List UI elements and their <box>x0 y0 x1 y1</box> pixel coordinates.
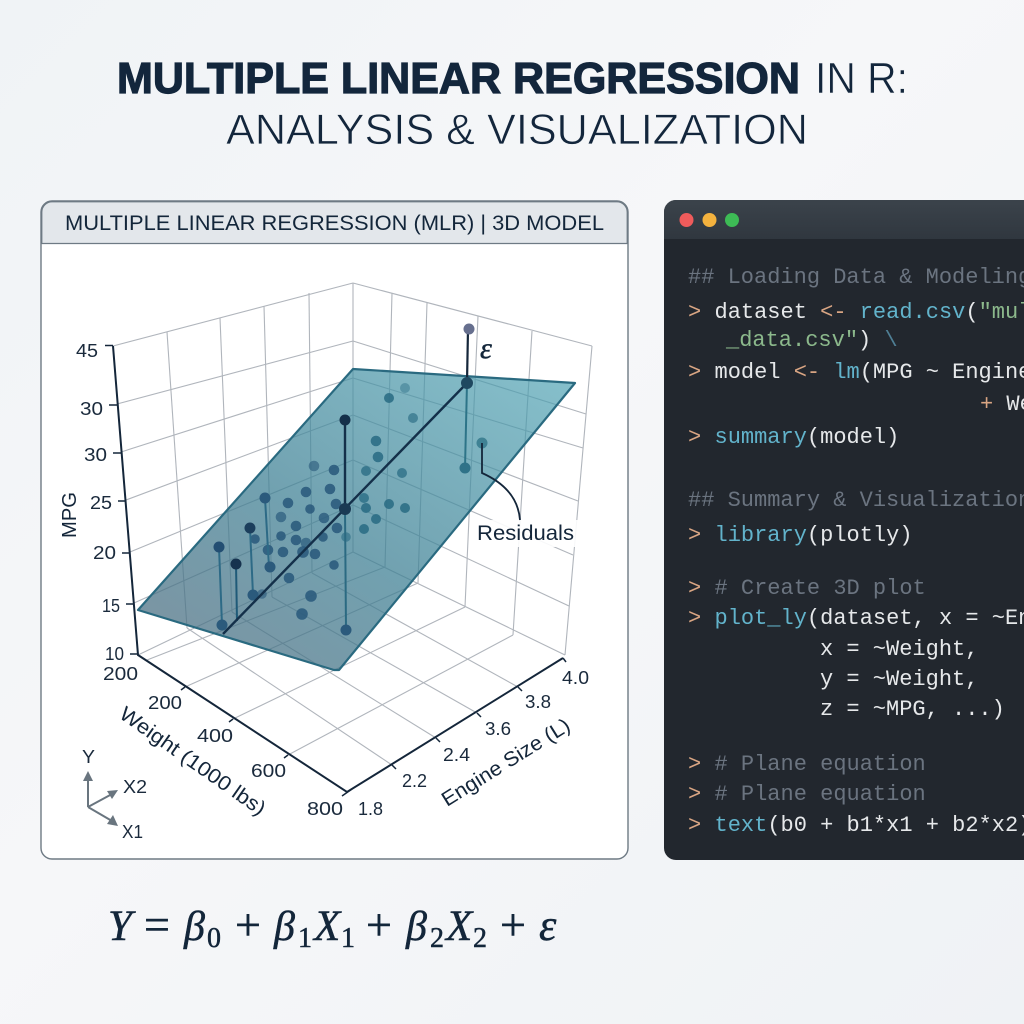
code: summary and visualization: y = ~Weight, <box>820 667 978 692</box>
y axis tick labels: 45 <box>76 340 98 361</box>
code: loading and modeling: > <box>688 360 701 385</box>
residuals callout: Residuals <box>477 522 574 545</box>
engine axis tick labels: 3.8 <box>525 691 551 712</box>
panel: 3D regression model <box>41 201 628 859</box>
y axis tick labels: 30 <box>84 444 107 465</box>
engine axis tick labels: 3.6 <box>485 718 511 739</box>
panel heading: MULTIPLE LINEAR REGRESSION (MLR) | 3D MODEL <box>65 212 604 235</box>
regression equation: 1 <box>298 923 312 954</box>
code: summary and visualization: # Create 3D plot <box>714 576 926 601</box>
code: plane equation: text <box>714 813 767 838</box>
code: plane equation: > <box>688 782 701 807</box>
weight axis tick labels: 600 <box>251 760 286 781</box>
icon: orientation axes <box>82 746 147 842</box>
code: summary and visualization: library <box>714 523 807 548</box>
regression equation: X <box>312 903 342 950</box>
fitted regression line <box>223 377 473 634</box>
residuals callout <box>472 443 578 547</box>
weight axis tick labels: 200 <box>103 663 138 684</box>
epsilon label: ε <box>480 332 492 365</box>
regression equation: + <box>500 899 526 950</box>
regression equation: X <box>444 903 474 950</box>
terminal title bar <box>664 200 1024 239</box>
code: summary and visualization <box>688 488 1024 722</box>
axis title: engine size: Engine Size (L) <box>437 714 574 811</box>
weight axis tick labels: 800 <box>307 798 343 819</box>
weight axis tick labels: 400 <box>197 725 233 746</box>
code: plane equation: > <box>688 813 701 838</box>
title <box>117 55 908 154</box>
3D grid walls and floor <box>113 283 592 765</box>
engine axis tick labels <box>358 667 589 819</box>
regression equation <box>108 899 557 954</box>
code: plane equation: # Plane equation <box>714 782 926 807</box>
regression equation: 0 <box>207 923 221 954</box>
code: loading and modeling: > <box>688 300 701 325</box>
regression plane <box>138 369 575 670</box>
regression equation: + <box>235 899 261 950</box>
title: IN R: <box>815 55 908 103</box>
regression equation: β <box>405 904 427 950</box>
window buttons <box>680 213 739 227</box>
title: ANALYSIS & VISUALIZATION <box>226 106 808 154</box>
y axis tick labels: 30 <box>80 398 103 419</box>
y axis tick labels <box>76 340 124 664</box>
code: summary and visualization: ## Summary & Visualization <box>688 488 1024 513</box>
code: loading and modeling: model <box>714 360 794 385</box>
y axis tick labels: 20 <box>93 542 116 563</box>
panel header bar <box>42 202 627 244</box>
code: loading and modeling: dataset <box>714 300 820 325</box>
code: plane equation: > <box>688 752 701 777</box>
y axis tick labels: 25 <box>90 492 112 513</box>
axes <box>105 346 566 796</box>
residual stems with points <box>214 324 488 636</box>
code: summary and visualization: > <box>688 576 701 601</box>
floor grid <box>138 552 565 765</box>
engine axis tick labels: 4.0 <box>562 667 589 688</box>
right wall grid <box>353 283 592 655</box>
regression equation: = <box>144 899 170 950</box>
engine axis tick labels: 1.8 <box>358 798 383 819</box>
regression equation: β <box>273 904 295 950</box>
code: summary and visualization: (plotly) <box>807 523 913 548</box>
icon: orientation axes: Y <box>82 746 95 767</box>
code: summary and visualization: > <box>688 523 701 548</box>
regression equation: 1 <box>341 923 355 954</box>
engine axis tick labels: 2.2 <box>402 770 427 791</box>
regression equation: + <box>366 899 392 950</box>
icon: orientation axes: X2 <box>123 776 147 797</box>
code: plane equation: (b0 + b1*x1 + b2*x2) <box>767 813 1024 838</box>
weight axis tick labels <box>103 663 343 819</box>
regression equation: 2 <box>473 923 487 954</box>
code: summary and visualization: z = ~MPG, ...) <box>820 697 1005 722</box>
icon: orientation axes: X1 <box>122 821 143 842</box>
code: loading and modeling: ## Loading Data & Modeling <box>688 265 1024 290</box>
code: plane equation: # Plane equation <box>714 752 926 777</box>
weight axis tick labels: 200 <box>148 692 182 713</box>
regression equation: ε <box>539 901 557 950</box>
code: summary and visualization: plot_ly <box>714 606 807 631</box>
code: plane equation <box>688 752 1024 838</box>
engine axis tick labels: 2.4 <box>443 744 470 765</box>
code: loading and modeling: > <box>688 425 701 450</box>
code: loading and modeling <box>688 265 1024 450</box>
code: summary and visualization: > <box>688 606 701 631</box>
code: loading and modeling: (model) <box>807 425 899 450</box>
title: MULTIPLE LINEAR REGRESSION <box>117 55 800 103</box>
y axis tick labels: 10 <box>105 643 124 664</box>
regression equation: Y <box>108 903 136 950</box>
regression equation: 2 <box>430 923 444 954</box>
y axis tick labels: 15 <box>102 595 120 616</box>
code: loading and modeling: _data.csv") \ <box>725 328 898 353</box>
left wall verticals <box>113 283 353 628</box>
panel: R code terminal <box>664 200 1024 860</box>
code: summary and visualization: x = ~Weight, <box>820 637 978 662</box>
scatter points under plane <box>250 461 342 620</box>
code: loading and modeling: summary <box>714 425 807 450</box>
axis title: MPG: MPG <box>59 492 81 538</box>
regression equation: β <box>183 904 205 950</box>
axis title: weight: Weight (1000 lbs) <box>115 702 270 820</box>
